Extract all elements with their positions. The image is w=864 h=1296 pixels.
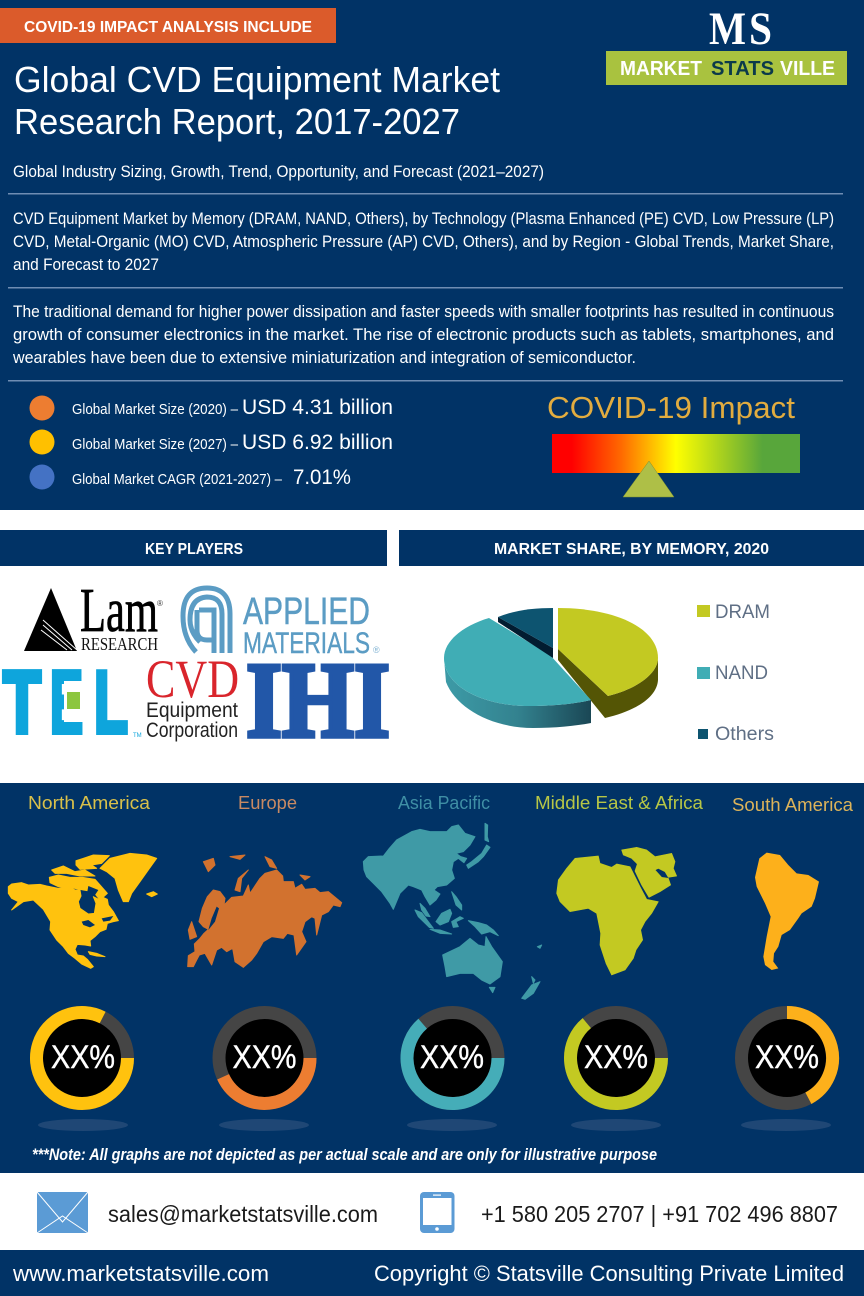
donut: North America: [36, 1012, 128, 1131]
donut: Europe: [219, 1012, 310, 1131]
map: Middle East and Africa: [557, 847, 677, 975]
logo: Applied Materials: [183, 588, 380, 660]
map: North America: [8, 853, 157, 968]
logo: Lam Research: Lam: [80, 577, 158, 645]
stat: market size 2020: USD 4.31 billion: [242, 396, 393, 419]
legend: pie chart: [697, 602, 774, 745]
donut: Asia Pacific: [407, 1012, 498, 1131]
legend: pie chart: DRAM: [715, 602, 770, 623]
map: Europe: [188, 855, 342, 967]
region heading: Europe: Europe: [238, 793, 297, 813]
slice: Others: [498, 608, 553, 658]
badge: COVID-19 impact analysis: COVID-19 IMPACT ANALYSIS INCLUDE: [24, 19, 312, 36]
logo: Market Stats Ville: VILLE: [780, 58, 835, 80]
footer: website: www.marketstatsville.com: [12, 1261, 269, 1286]
badge: COVID-19 impact analysis: [0, 8, 336, 43]
map: South America: [755, 853, 819, 970]
icon: phone: [420, 1192, 454, 1233]
logo: Applied Materials: MATERIALS: [243, 627, 370, 660]
title: [14, 59, 500, 142]
logo: Market Stats Ville: STATS: [711, 58, 774, 80]
slice: DRAM: [558, 608, 658, 718]
logo: TEL: E: [50, 652, 83, 752]
heading: key players: [0, 530, 387, 566]
region heading: Middle East and Africa: Middle East & Africa: [535, 793, 704, 813]
text block: market description: [12, 303, 834, 367]
contact: email: sales@marketstatsville.com: [108, 1201, 378, 1227]
legend: pie chart: Others: [715, 724, 774, 745]
text block: market description: The traditional demand for higher power dissipation and faster speeds with smaller footprints has resulted in continuous: [13, 303, 834, 321]
stat: CAGR: [30, 464, 351, 490]
legend: pie chart: NAND: [715, 663, 768, 684]
stat: CAGR: Global Market CAGR (2021-2027) –: [72, 471, 283, 488]
heading: key players: KEY PLAYERS: [145, 541, 243, 558]
logo: IHI: IHI: [246, 642, 390, 761]
donut: North America: XX%: [51, 1039, 115, 1075]
stat: market size 2027: [30, 430, 393, 454]
text block: market description: growth of consumer electronics in the market. The rise of electronic products such as tablets, smartphones, and: [13, 326, 834, 344]
stat: market size 2027: USD 6.92 billion: [242, 431, 393, 454]
slice: NAND: [444, 618, 591, 728]
donut: Middle East and Africa: XX%: [584, 1039, 648, 1075]
subtitle: Global Industry Sizing, Growth, Trend, Opportunity, and Forecast (2021–2027): [13, 163, 544, 181]
heading: market share: [399, 530, 864, 566]
COVID-19 impact gauge: COVID-19 Impact: [547, 390, 795, 425]
donut: South America: [741, 1012, 833, 1131]
logo: Market Stats Ville: MARKET: [620, 58, 702, 80]
logo: Lam Research: [24, 577, 163, 654]
donut: South America: XX%: [755, 1039, 819, 1075]
logo: Market Stats Ville: [606, 3, 847, 85]
donut: Europe: XX%: [232, 1039, 296, 1075]
stat: CAGR: 7.01%: [293, 466, 351, 489]
logo: CVD Equipment Corporation: Equipment: [146, 699, 238, 722]
logo: CVD Equipment Corporation: [146, 649, 239, 742]
text block: market scope: [13, 210, 834, 274]
map: Asia Pacific: [363, 823, 542, 999]
heading: market share: MARKET SHARE, BY MEMORY, 2020: [494, 541, 769, 558]
logo: TEL: TM: [133, 733, 142, 739]
text block: market description: wearables have been due to extensive miniaturization and integration of semiconductor.: [12, 349, 636, 367]
key statistics: [30, 396, 393, 490]
region heading: South America: South America: [732, 795, 854, 815]
logo: CVD Equipment Corporation: CVD: [146, 649, 239, 709]
logo: TEL: [3, 652, 142, 752]
pie chart: market share by memory: [444, 608, 658, 728]
region heading: North America: North America: [28, 793, 151, 813]
logo: Market Stats Ville: S: [749, 3, 772, 55]
stat: market size 2020: Global Market Size (2020) –: [72, 401, 239, 418]
region heading: Asia Pacific: Asia Pacific: [398, 793, 490, 813]
logo: CVD Equipment Corporation: Corporation: [146, 719, 238, 742]
logo: TEL: T: [3, 652, 41, 752]
footer: copyright: Copyright © Statsville Consulting Private Limited: [374, 1261, 844, 1286]
logo: Applied Materials: ®: [373, 645, 380, 655]
contact: phone numbers: +1 580 205 2707 | +91 702 496 8807: [481, 1201, 838, 1227]
stat: market size 2020: [30, 396, 393, 420]
logo: TEL: L: [94, 652, 128, 752]
note: ***Note: All graphs are not depicted as per actual scale and are only for illustrative purpose: [32, 1146, 657, 1164]
donut: Asia Pacific: XX%: [420, 1039, 484, 1075]
title: Global CVD Equipment Market: [14, 59, 500, 100]
title: Research Report, 2017-2027: [14, 101, 460, 142]
logo: Lam Research: ®: [157, 599, 163, 608]
COVID-19 impact gauge: [547, 390, 800, 497]
logo: Market Stats Ville: M: [709, 3, 746, 55]
stat: market size 2027: Global Market Size (2027) –: [72, 436, 239, 453]
text block: market scope: and Forecast to 2027: [13, 256, 159, 274]
icon: envelope: [37, 1192, 88, 1233]
donut: Middle East and Africa: [570, 1012, 662, 1131]
logo: Applied Materials: APPLIED: [243, 591, 370, 633]
logo: Lam Research: RESEARCH: [81, 634, 158, 654]
